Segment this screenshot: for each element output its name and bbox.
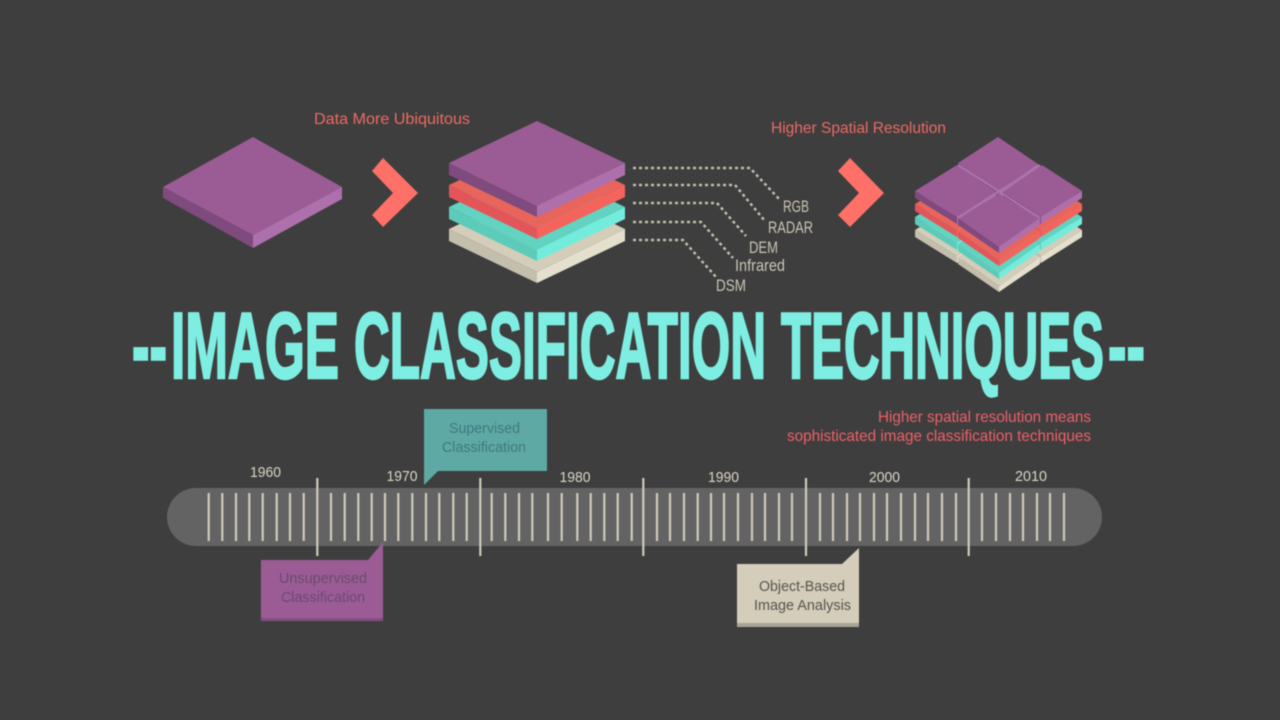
note: higher spatial resolution means: sophisticated image classification techniques	[787, 428, 1091, 445]
title: IMAGE	[171, 293, 339, 398]
callout: unsupervised classification: Classification	[281, 589, 365, 606]
arrow: chevron one	[372, 158, 418, 227]
heading: data more ubiquitous: Data More Ubiquitous	[314, 111, 470, 128]
title: CLASSIFICATION	[354, 293, 766, 398]
year labels: 1970	[386, 468, 418, 485]
callout: supervised classification: Classification	[442, 439, 526, 456]
callout: unsupervised classification: Unsupervised	[279, 570, 367, 587]
layer labels: RADAR	[768, 218, 813, 237]
year labels: 1960	[250, 464, 281, 481]
callout: object-based image analysis	[737, 548, 859, 627]
heading: higher spatial resolution: Higher Spatial Resolution	[771, 120, 946, 137]
timeline major ticks	[317, 478, 969, 556]
arrow: chevron two	[838, 158, 884, 227]
callout: unsupervised classification	[261, 542, 383, 621]
callout: supervised classification	[424, 409, 547, 485]
title: --	[132, 293, 167, 398]
note: higher spatial resolution means	[787, 409, 1091, 445]
layer labels: Infrared	[735, 256, 785, 275]
layer labels	[716, 197, 813, 295]
layer labels: DEM	[749, 238, 778, 257]
note: higher spatial resolution means: Higher spatial resolution means	[878, 409, 1091, 426]
title: --	[1108, 293, 1145, 398]
callout: supervised classification: Supervised	[449, 420, 520, 437]
layer labels: DSM	[716, 276, 746, 295]
icon: stacked data layers	[449, 121, 625, 283]
icon: single purple data layer	[163, 137, 342, 248]
year labels	[250, 464, 1047, 486]
timeline bar	[167, 488, 1102, 546]
year labels: 2000	[869, 469, 900, 486]
dotted leader lines	[633, 168, 780, 277]
year labels: 1990	[708, 469, 739, 486]
callout: object-based image analysis: Image Analysis	[754, 597, 851, 614]
year labels: 2010	[1015, 468, 1047, 485]
timeline minor ticks	[209, 493, 1064, 541]
callout: object-based image analysis: Object-Based	[759, 578, 845, 595]
icon: high resolution tiled stack	[915, 137, 1082, 292]
year labels: 1980	[560, 469, 590, 486]
layer labels: RGB	[783, 197, 809, 216]
